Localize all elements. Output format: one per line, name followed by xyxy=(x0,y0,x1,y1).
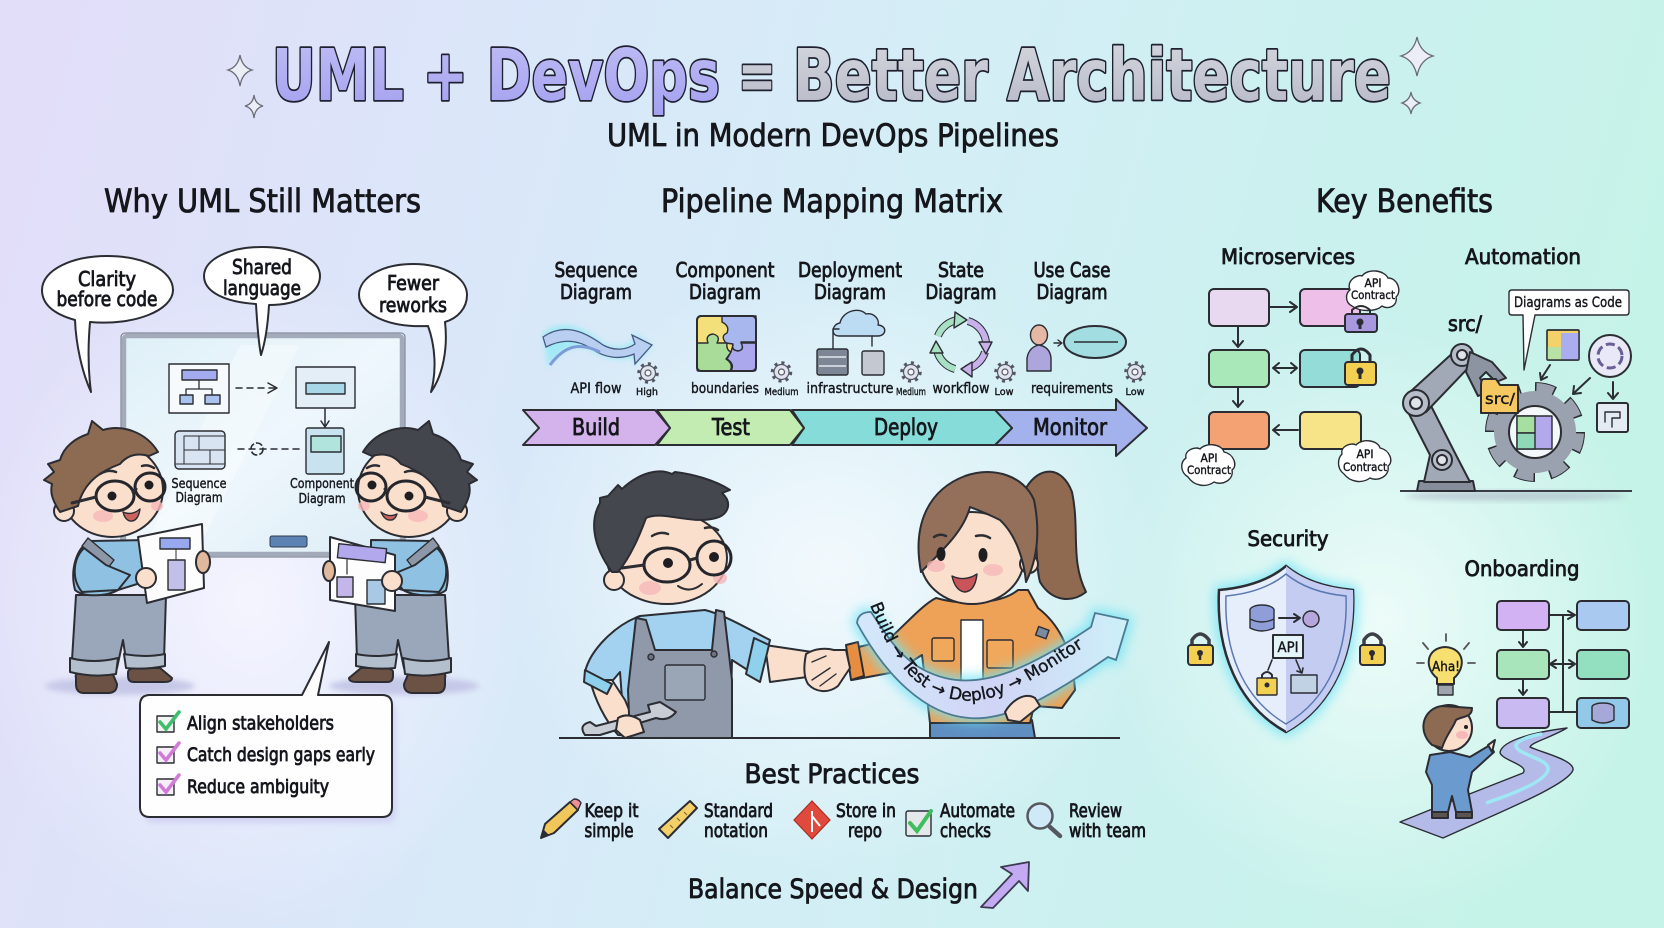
whiteboard: Diagram xyxy=(176,491,222,506)
cloud: API contract top: Contract xyxy=(1351,288,1395,302)
column: sequence diagram: API flow xyxy=(570,381,622,397)
practice: standard notation: Standard xyxy=(704,800,773,822)
column: component diagram: Component xyxy=(676,258,775,282)
practice: standard notation: notation xyxy=(704,820,768,842)
column: use case diagram: Use Case xyxy=(1034,258,1110,282)
stage: test: Test xyxy=(711,415,750,441)
practice: keep it simple: Keep it xyxy=(584,800,638,822)
column: sequence diagram: Sequence xyxy=(554,258,638,282)
practice: store in repo xyxy=(794,800,896,842)
road xyxy=(1400,728,1573,838)
benefit: microservices: Microservices xyxy=(1221,245,1355,269)
speech bubble: clarity before code xyxy=(42,256,173,392)
speech bubble: shared language xyxy=(204,247,320,355)
icon: src folder: src/ xyxy=(1485,390,1516,408)
column: deployment diagram: Diagram xyxy=(814,280,886,304)
column: use case diagram: Diagram xyxy=(1036,280,1108,304)
column: state diagram: State xyxy=(938,258,984,282)
callout: diagrams as code: Diagrams as Code xyxy=(1514,295,1622,311)
callout: diagrams as code xyxy=(1509,290,1629,370)
speech bubble: clarity before code: before code xyxy=(56,287,158,311)
practice: keep it simple: simple xyxy=(584,820,634,842)
speech bubble: shared language: Shared xyxy=(232,255,292,279)
icon: handshake xyxy=(804,649,850,691)
practice: store in repo: repo xyxy=(848,820,882,842)
arrow: glowing ribbon build test deploy monitor xyxy=(846,601,1138,729)
stage: build: Build xyxy=(572,415,620,441)
whiteboard xyxy=(121,333,405,557)
check item: align stakeholders: Align stakeholders xyxy=(187,712,334,734)
benefit: onboarding: Onboarding xyxy=(1464,557,1580,581)
column: sequence diagram xyxy=(543,258,658,398)
column: component diagram: boundaries xyxy=(691,381,759,397)
icon: gear with puzzle xyxy=(1491,388,1579,476)
title: = xyxy=(738,34,776,117)
whiteboard: Sequence xyxy=(172,477,227,492)
panel: pipeline mapping matrix xyxy=(522,258,1148,909)
heading: why UML still matters: Why UML Still Matters xyxy=(104,182,421,220)
column: state diagram: Diagram xyxy=(926,280,996,304)
character: engineer in overalls xyxy=(582,471,822,738)
column: use case diagram: Low xyxy=(1126,387,1144,398)
stage: deploy: Deploy xyxy=(874,415,938,441)
column: component diagram: Medium xyxy=(764,387,798,398)
speech bubble: fewer reworks xyxy=(359,264,467,392)
benefit: automation xyxy=(1400,245,1632,501)
check item: catch design gaps early xyxy=(157,743,375,766)
practice: review with team: with team xyxy=(1069,820,1146,842)
ground line xyxy=(559,737,1120,739)
cloud: API contract top: API xyxy=(1364,276,1382,290)
cloud: API contract left xyxy=(1182,445,1235,485)
speech bubble: clarity before code: Clarity xyxy=(78,267,136,291)
icon: sparkles xyxy=(228,37,1433,118)
character: left engineer with brown hair xyxy=(44,421,210,695)
character: new team member xyxy=(1423,705,1495,818)
practice: automate checks: Automate xyxy=(940,800,1015,822)
icon: automation puzzle and pipeline inputs xyxy=(1540,330,1631,432)
icon: shield: API xyxy=(1278,640,1298,656)
title: Better Architecture xyxy=(793,34,1391,117)
column: use case diagram: requirements xyxy=(1031,381,1113,397)
check item: reduce ambiguity xyxy=(157,775,329,798)
stage: build xyxy=(523,410,670,445)
column: state diagram: Low xyxy=(994,387,1014,398)
benefit: automation: src/ xyxy=(1448,312,1483,336)
benefit: microservices xyxy=(1182,245,1399,485)
subtitle: UML in Modern DevOps Pipelines xyxy=(607,118,1059,154)
tagline: balance speed and design: Balance Speed & Design xyxy=(688,874,978,905)
icon: yellow lock xyxy=(1345,349,1376,385)
speech bubble: fewer reworks: reworks xyxy=(379,293,447,317)
column: sequence diagram: High xyxy=(636,387,658,398)
icon: shield xyxy=(1219,566,1353,732)
column: state diagram xyxy=(926,258,1014,398)
icon: robot arm xyxy=(1403,344,1506,491)
column: component diagram: Diagram xyxy=(689,280,761,304)
column: state diagram: workflow xyxy=(932,381,990,397)
practice: store in repo: Store in xyxy=(836,800,896,822)
callout: checklist xyxy=(140,642,396,823)
icon: aha lightbulb xyxy=(1417,634,1475,695)
column: component diagram xyxy=(676,258,798,398)
title: UML + DevOps xyxy=(272,34,720,117)
stage: deploy xyxy=(792,410,1012,445)
benefit: automation: Automation xyxy=(1465,245,1581,269)
speech bubble: shared language: language xyxy=(223,276,301,300)
check item: catch design gaps early: Catch design gaps early xyxy=(187,744,375,766)
practice: standard notation xyxy=(659,800,773,842)
benefit: onboarding xyxy=(1400,557,1629,838)
arrow: purple upward xyxy=(981,862,1029,908)
icon: src folder xyxy=(1481,379,1518,413)
practice: review with team: Review xyxy=(1069,800,1122,822)
cloud: API contract top xyxy=(1346,271,1399,310)
benefit: security: Security xyxy=(1248,527,1328,551)
heading: key benefits: Key Benefits xyxy=(1316,182,1493,220)
heading: best practices: Best Practices xyxy=(744,759,920,790)
stage: monitor: Monitor xyxy=(1033,415,1107,441)
panel: key benefits xyxy=(1182,245,1632,838)
title xyxy=(272,34,1391,117)
column: deployment diagram xyxy=(798,258,926,398)
arrow: pipeline stages xyxy=(523,399,1147,456)
panel: why UML still matters xyxy=(42,247,479,823)
column: deployment diagram: Medium xyxy=(896,387,926,398)
practice: automate checks xyxy=(906,800,1015,842)
icon: right padlock xyxy=(1360,634,1385,665)
icon: aha lightbulb: Aha! xyxy=(1432,660,1460,675)
character: woman in orange jacket xyxy=(846,472,1086,738)
arrow: glowing ribbon build test deploy monitor: Build → Test → Deploy → Monitor xyxy=(870,602,1081,704)
column: deployment diagram: Deployment xyxy=(798,258,902,282)
practice: automate checks: checks xyxy=(940,820,991,842)
whiteboard: Component xyxy=(290,477,354,492)
check item: reduce ambiguity: Reduce ambiguity xyxy=(187,776,329,798)
cloud: API contract left: Contract xyxy=(1187,463,1231,477)
speech bubble: fewer reworks: Fewer xyxy=(387,271,440,295)
character: right engineer with dark hair xyxy=(323,421,479,695)
cloud: API contract right: Contract xyxy=(1343,460,1387,474)
practice: keep it simple xyxy=(541,799,638,842)
whiteboard: Diagram xyxy=(298,492,346,507)
stage: test xyxy=(657,410,804,445)
icon: left padlock xyxy=(1188,634,1213,665)
cloud: API contract right xyxy=(1338,441,1391,481)
practice: review with team xyxy=(1028,800,1146,842)
icon: purple lock xyxy=(1345,306,1377,332)
column: use case diagram xyxy=(1027,258,1144,398)
cloud: API contract right: API xyxy=(1356,447,1374,461)
column: sequence diagram: Diagram xyxy=(560,280,632,304)
column: deployment diagram: infrastructure xyxy=(806,381,894,397)
benefit: security xyxy=(1188,527,1385,732)
heading: pipeline mapping matrix: Pipeline Mapping Matrix xyxy=(661,182,1003,220)
cloud: API contract left: API xyxy=(1200,451,1218,465)
stage: monitor xyxy=(995,399,1147,456)
